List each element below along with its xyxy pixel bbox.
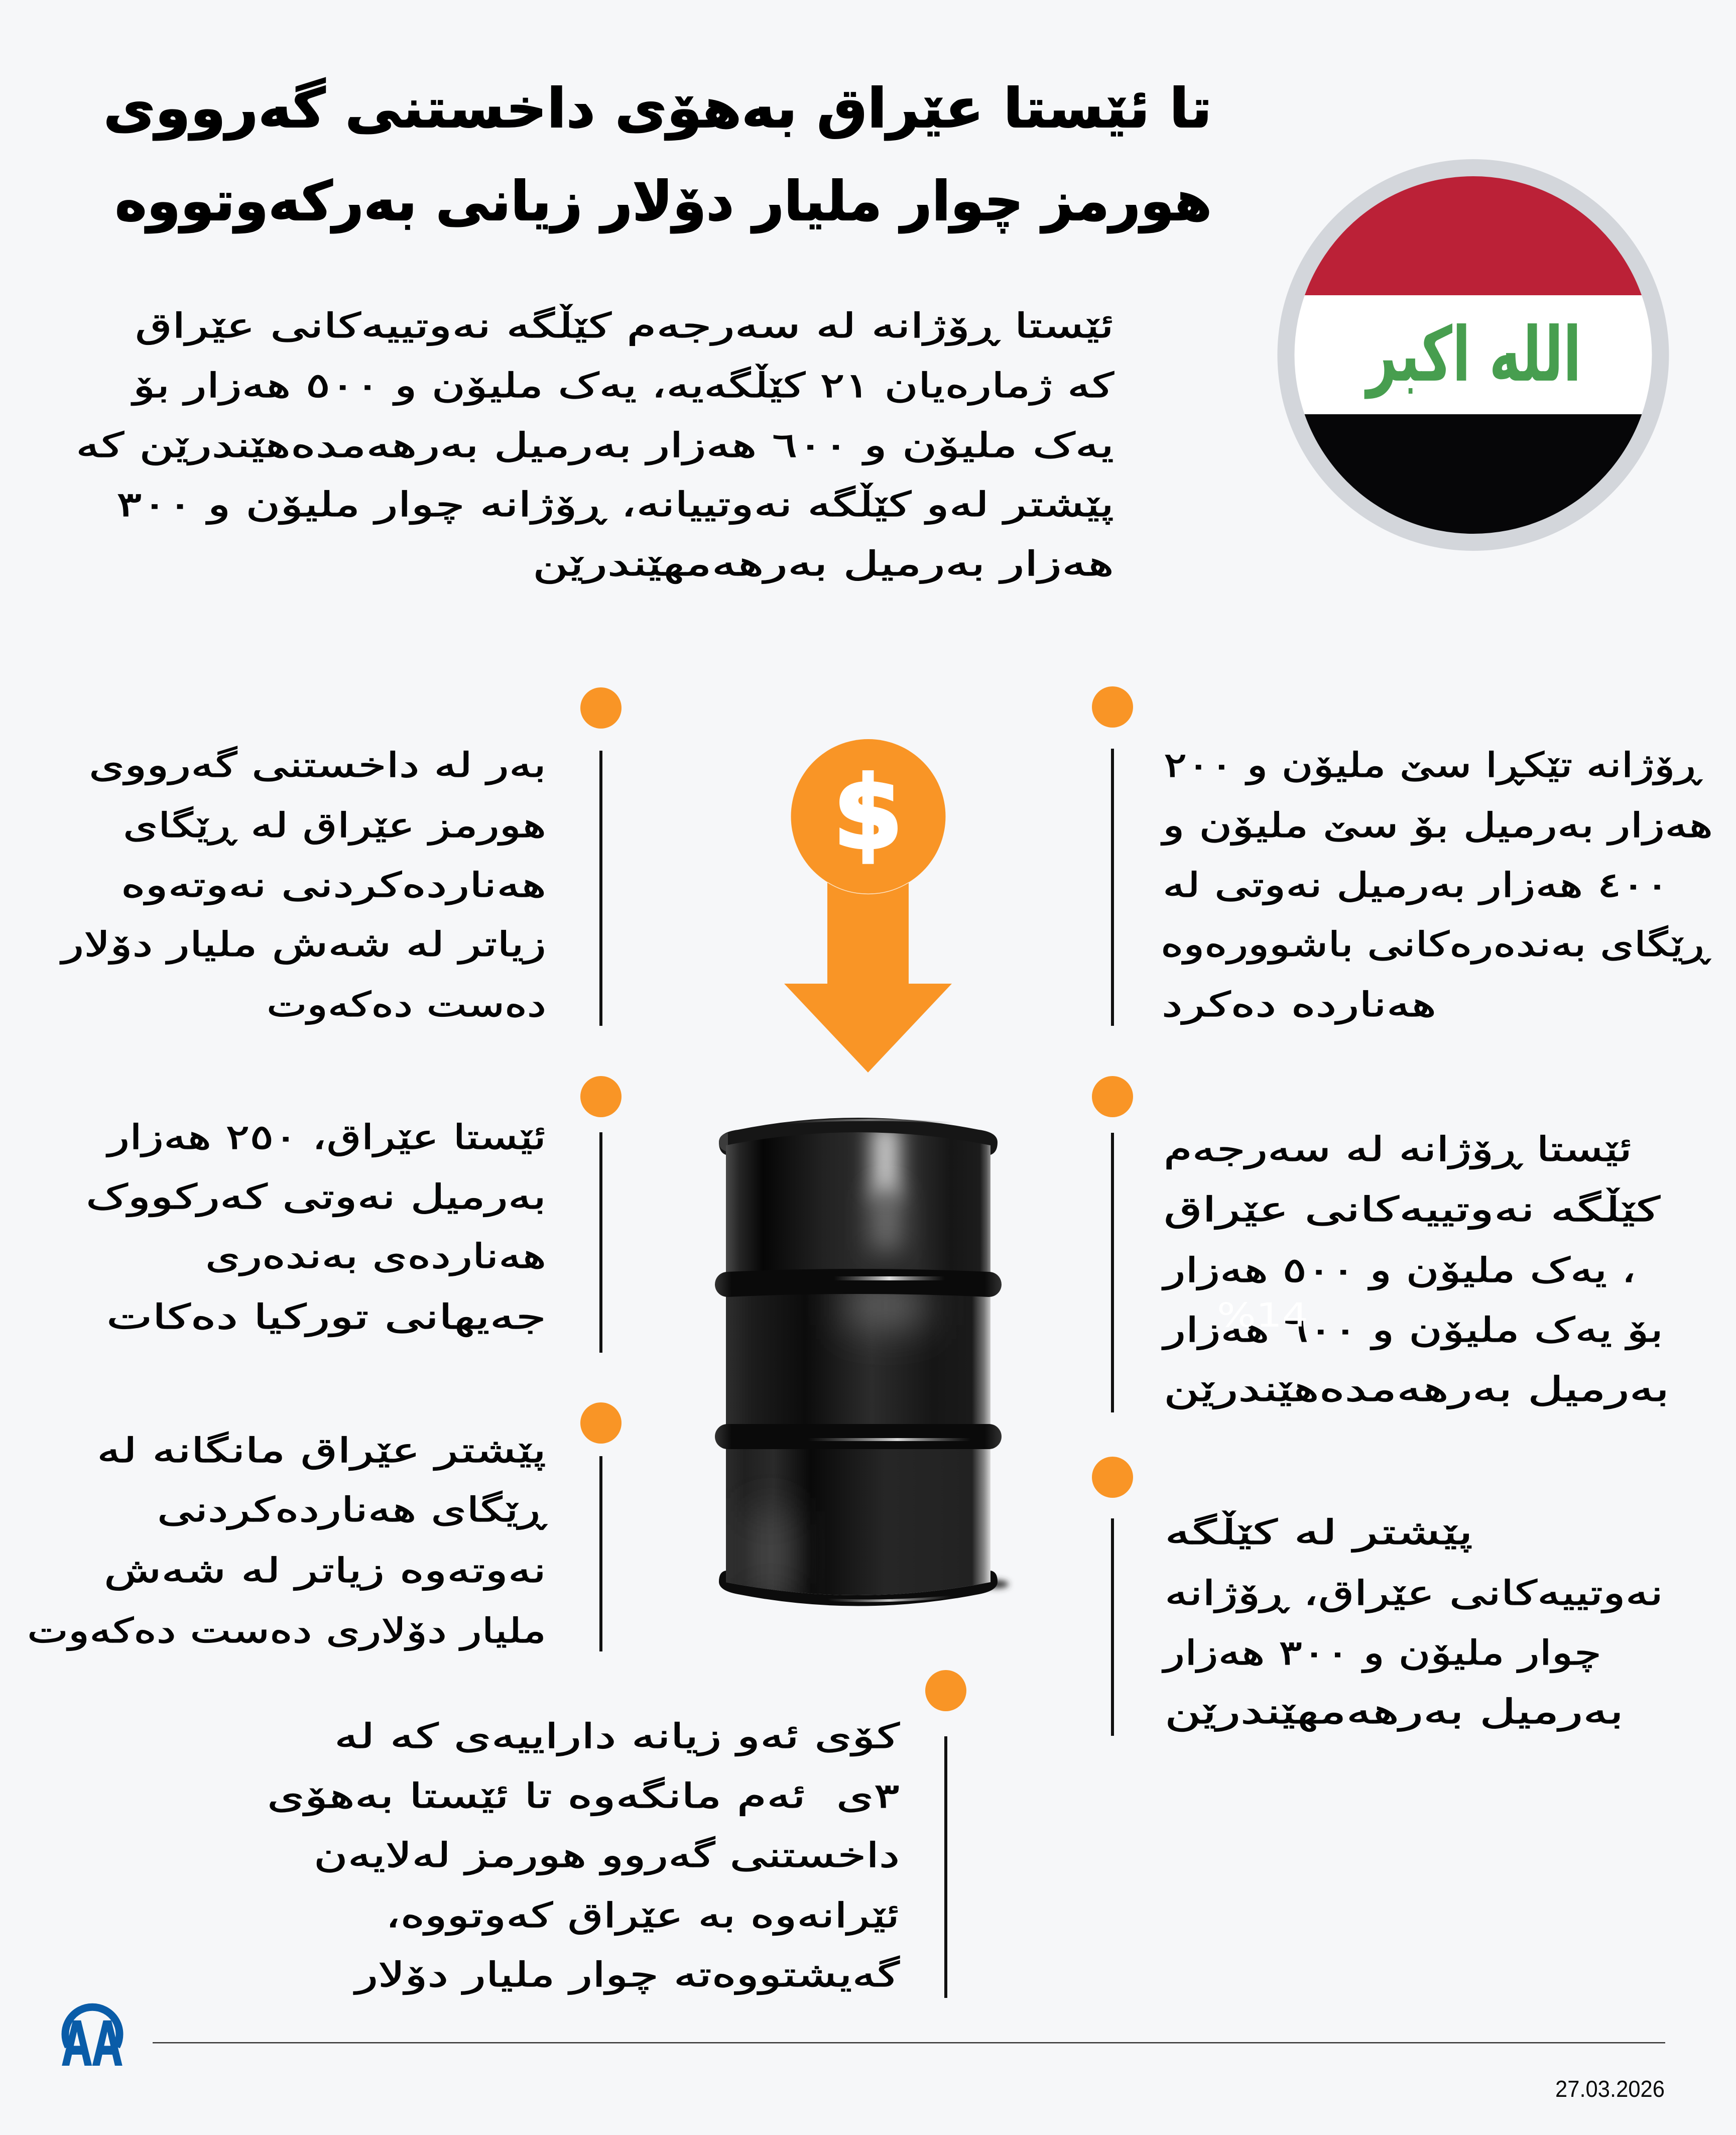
text: هەناردەکردنی نەوتەوە — [121, 866, 546, 905]
text — [1162, 1130, 1669, 1409]
vertical line — [599, 1132, 602, 1353]
vertical line — [599, 751, 602, 1026]
panel: bottom item — [267, 1670, 966, 1998]
text: بەر لە داخستنی گەرووی — [89, 746, 546, 785]
barrel body: lower segment — [726, 1446, 990, 1595]
text: نەوتییەکانی عێراق، ڕۆژانە — [1165, 1574, 1663, 1613]
faint percent label: %14 — [1217, 1296, 1308, 1335]
text: پێشتر لە کێڵگە — [1165, 1511, 1473, 1553]
bullet — [580, 1076, 622, 1117]
icon: Iraq flag — [1277, 159, 1669, 551]
bullet — [1092, 1076, 1133, 1117]
text — [60, 746, 546, 1025]
text: ڕێگای هەناردەکردنی — [157, 1490, 548, 1530]
text: جەیهانی تورکیا دەکات — [106, 1297, 546, 1337]
text: ، یەک ملیۆن و ٥٠٠ هەزار — [1162, 1251, 1636, 1290]
panel: left item 3 — [27, 1402, 622, 1651]
dollar coin — [791, 739, 946, 894]
dollar sign: $ — [833, 755, 903, 871]
text: نەوتەوە زیاتر لە شەش — [104, 1551, 546, 1591]
text: ئێرانەوە بە عێراق کەوتووە، — [386, 1896, 900, 1936]
intro text block — [76, 304, 1114, 584]
text: هورمز عێراق لە ڕێگای — [123, 806, 546, 846]
barrel body: upper segment — [726, 1132, 990, 1275]
text — [1161, 746, 1713, 1025]
text: گەیشتووەتە چوار ملیار دۆلار — [353, 1955, 900, 1995]
bottom rim — [719, 1571, 998, 1606]
upper hoop — [727, 1281, 989, 1284]
text: هەناردە دەکرد — [1162, 985, 1436, 1025]
text: هەناردەی بەندەری — [205, 1237, 546, 1276]
bullet — [1092, 1457, 1133, 1498]
top rim — [719, 1118, 998, 1155]
text: ڕێگای بەندەرەکانی باشوورەوە — [1161, 925, 1711, 965]
text — [267, 1717, 900, 1995]
text — [86, 1118, 546, 1337]
text: زیاتر لە شەش ملیار دۆلار — [60, 925, 546, 965]
title: تا ئێستا عێراق بەهۆی داخستنی گەرووی — [103, 77, 1212, 141]
intro text block: ئێستا ڕۆژانە لە سەرجەم کێڵگە نەوتییەکانی عێراق — [135, 304, 1114, 346]
intro text block: پێشتر لەو کێڵگە نەوتییانە، ڕۆژانە چوار ملیۆن و ٣٠٠ — [116, 483, 1114, 525]
text: داخستنی گەروو هورمز لەلایەن — [314, 1836, 900, 1875]
text: کۆی ئەو زیانە داراییەی کە لە — [334, 1717, 900, 1756]
panel: left item 1 — [60, 687, 622, 1026]
icon: Iraq flag: الله اكبر — [1364, 311, 1581, 399]
text: هەزار بەرمیل بۆ سێ ملیۆن و — [1161, 806, 1713, 846]
date: 27.03.2026 — [1555, 2076, 1665, 2102]
arrow — [784, 882, 952, 1073]
logo: Anadolu Agency: AA — [62, 2008, 122, 2078]
text: بەرمیل بەرهەمدەهێندرێن — [1164, 1370, 1669, 1409]
text: ئێستا عێراق، ٢٥٠ هەزار — [106, 1118, 546, 1157]
text: ملیار دۆلاری دەست دەکەوت — [27, 1611, 546, 1651]
vertical line — [1111, 1518, 1114, 1736]
panel: right item 3 — [1092, 1457, 1663, 1736]
title: هورمز چوار ملیار دۆلار زیانی بەرکەوتووە — [115, 170, 1212, 233]
text: ٣ی ئەم مانگەوە تا ئێستا بەهۆی — [267, 1776, 900, 1816]
vertical line — [944, 1736, 947, 1998]
lower hoop — [727, 1424, 989, 1449]
text: چوار ملیۆن و ٣٠٠ هەزار — [1162, 1633, 1601, 1673]
text: پێشتر عێراق مانگانە لە — [97, 1431, 546, 1471]
intro text block: یەک ملیۆن و ٦٠٠ هەزار بەرمیل بەرهەمدەهێندرێن کە — [76, 426, 1114, 465]
vertical line — [1111, 749, 1114, 1026]
intro text block: کە ژمارەیان ٢١ کێڵگەیە، یەک ملیۆن و ٥٠٠ هەزار بۆ — [131, 364, 1114, 406]
bullet — [580, 687, 622, 729]
panel: right item 2 — [1092, 1076, 1669, 1412]
vertical line — [599, 1456, 602, 1651]
vertical line — [1111, 1133, 1114, 1412]
footer line — [153, 2042, 1665, 2044]
bullet — [1092, 686, 1133, 728]
text: بەرمیل بەرهەمهێندرێن — [1165, 1692, 1624, 1732]
bullet — [580, 1402, 622, 1444]
text: ٤٠٠ هەزار بەرمیل نەوتی لە — [1163, 866, 1669, 905]
title — [103, 77, 1212, 233]
text: ڕۆژانە تێکڕا سێ ملیۆن و ٢٠٠ — [1164, 746, 1703, 785]
panel: left item 2 — [86, 1076, 622, 1353]
text — [1162, 1511, 1663, 1732]
barrel body: middle segment — [726, 1293, 990, 1426]
text: ئێستا ڕۆژانە لە سەرجەم — [1164, 1130, 1632, 1169]
oil barrel — [719, 1118, 1009, 1606]
bullet — [925, 1670, 966, 1711]
text — [27, 1431, 548, 1651]
intro text block: هەزار بەرمیل بەرهەمهێندرێن — [533, 544, 1114, 584]
text: بۆ یەک ملیۆن و ٦٠٠ هەزار — [1162, 1311, 1663, 1350]
panel: right item 1 — [1092, 686, 1713, 1026]
barrel floor shadow — [984, 1580, 1009, 1588]
text: کێڵگە نەوتییەکانی عێراق — [1164, 1188, 1661, 1230]
text: بەرمیل نەوتی کەرکووک — [86, 1177, 546, 1217]
icon: dollar down arrow — [784, 739, 952, 1073]
logo: Anadolu Agency — [62, 2007, 122, 2078]
text: دەست دەکەوت — [267, 985, 546, 1025]
